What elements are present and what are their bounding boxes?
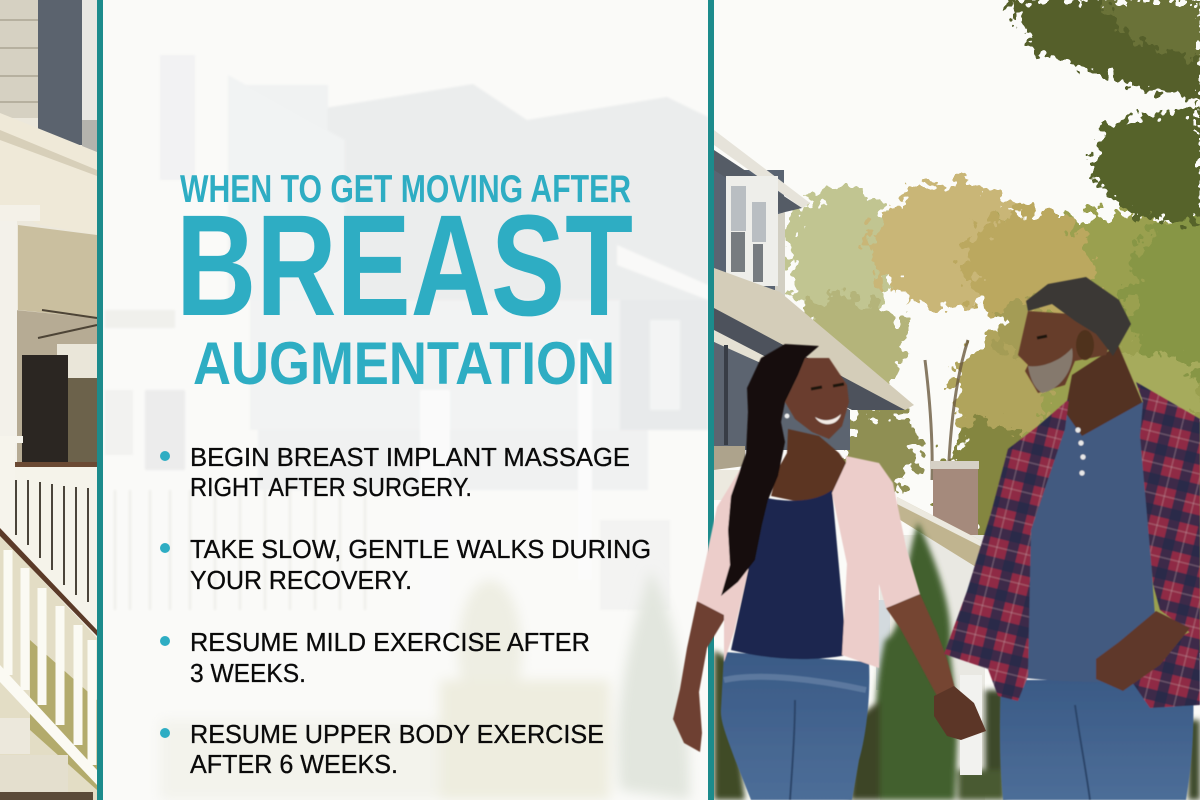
photo: man — [944, 277, 1200, 800]
plaid shirt — [944, 399, 1069, 701]
photo: woman — [673, 344, 957, 800]
bullet 1 — [160, 442, 630, 502]
bullet list — [160, 442, 651, 779]
title line: when to get moving after: WHEN TO GET MOVING AFTER — [180, 168, 631, 211]
column — [0, 205, 40, 221]
stairs — [0, 535, 97, 800]
bullet 2: TAKE SLOW, GENTLE WALKS DURING — [190, 534, 651, 564]
cardigan — [697, 459, 781, 662]
background: left house — [0, 0, 97, 800]
navy top — [731, 490, 847, 659]
fence — [960, 675, 982, 775]
panel border: left — [97, 0, 103, 800]
bullet 3: 3 WEEKS. — [190, 658, 306, 688]
bullet 3: RESUME MILD EXERCISE AFTER — [190, 627, 590, 657]
lower house — [880, 535, 985, 800]
ceiling fan blades — [38, 310, 97, 338]
bullet 1: BEGIN BREAST IMPLANT MASSAGE — [190, 442, 630, 472]
porch railing — [0, 443, 15, 643]
title line: augmentation: AUGMENTATION — [193, 330, 615, 397]
right arm — [886, 594, 957, 696]
bullet 4: RESUME UPPER BODY EXERCISE — [190, 719, 604, 749]
hair — [1026, 277, 1131, 356]
chimney — [933, 468, 978, 540]
jeans — [721, 652, 869, 800]
shutter — [38, 0, 82, 145]
henley tee — [1025, 402, 1160, 682]
tree trunks — [925, 340, 968, 480]
door — [22, 355, 68, 465]
panel border: right — [708, 0, 714, 800]
panel: text panel with faded houses — [97, 0, 714, 800]
autumn trees — [785, 183, 1200, 655]
forearm and hand — [1096, 611, 1190, 691]
jeans — [1000, 680, 1193, 800]
overhanging branches, top right — [1005, 0, 1200, 225]
title — [176, 168, 633, 397]
neck — [1065, 345, 1143, 438]
bullet 3 — [160, 627, 590, 688]
bullet 4 — [160, 719, 604, 779]
background: right street scene — [714, 0, 1200, 800]
photo: clasped hands — [934, 686, 986, 740]
neck and chest — [771, 429, 846, 503]
hair — [721, 344, 819, 596]
house on right — [714, 130, 985, 800]
bullet 4: AFTER 6 WEEKS. — [190, 749, 398, 779]
porch fascia — [0, 113, 97, 235]
cypress trees — [714, 522, 1200, 800]
bullet 2: YOUR RECOVERY. — [190, 565, 412, 595]
face — [785, 358, 849, 439]
siding — [0, 0, 38, 118]
bullet 2 — [160, 534, 651, 595]
face — [1018, 311, 1116, 393]
bullet 1: RIGHT AFTER SURGERY. — [190, 472, 472, 502]
title line: breast: BREAST — [176, 185, 633, 346]
beard — [1028, 348, 1073, 393]
left arm — [673, 601, 727, 752]
